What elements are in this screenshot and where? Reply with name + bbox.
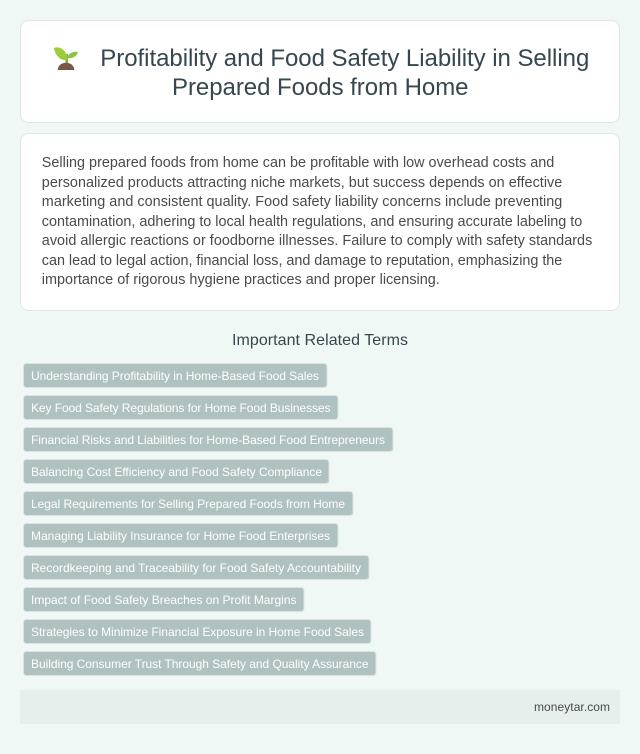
term: Understanding Profitability in Home-Based Food Sales (31, 369, 319, 383)
term (24, 556, 369, 580)
term (24, 652, 376, 676)
summary text (42, 155, 592, 288)
panel: title card (20, 20, 620, 122)
term: Building Consumer Trust Through Safety and Quality Assurance (31, 657, 369, 671)
term (24, 460, 329, 484)
title text (100, 45, 589, 101)
footer source text: moneytar.com (534, 700, 610, 714)
related terms list (24, 364, 393, 676)
title text: Prepared Foods from Home (172, 74, 468, 101)
term: Financial Risks and Liabilities for Home-Based Food Entrepreneurs (31, 433, 385, 447)
term: Impact of Food Safety Breaches on Profit Margins (31, 593, 296, 607)
term: Balancing Cost Efficiency and Food Safety Compliance (31, 465, 322, 479)
term (24, 428, 393, 452)
term (24, 588, 304, 612)
term: Key Food Safety Regulations for Home Food Businesses (31, 401, 330, 415)
term: Strategies to Minimize Financial Exposure in Home Food Sales (31, 625, 364, 639)
summary text: personalized products attracting niche markets, but success depends on effective (42, 175, 562, 191)
summary text: contamination, adhering to local health regulations, and ensuring accurate labeling to (42, 214, 582, 230)
title text: Profitability and Food Safety Liability in Selling (100, 45, 589, 72)
term (24, 524, 338, 548)
term (24, 396, 338, 420)
term: Managing Liability Insurance for Home Food Enterprises (31, 529, 330, 543)
panel: summary card (20, 134, 620, 310)
summary text: marketing and consistent quality. Food safety liability concerns include preventing (42, 194, 562, 210)
icon: seedling (54, 47, 78, 70)
summary text: avoid allergic reactions or foodborne illnesses. Failure to comply with safety standards (42, 233, 592, 249)
summary text: Selling prepared foods from home can be profitable with low overhead costs and (42, 155, 554, 171)
footer (20, 690, 620, 724)
summary text: importance of rigorous hygiene practices and proper licensing. (42, 272, 440, 288)
term: Legal Requirements for Selling Prepared Foods from Home (31, 497, 345, 511)
term: Recordkeeping and Traceability for Food Safety Accountability (31, 561, 361, 575)
term (24, 620, 371, 644)
section heading: Important Related Terms (232, 332, 408, 349)
term (24, 364, 327, 388)
term (24, 492, 353, 516)
summary text: can lead to legal action, financial loss, and damage to reputation, emphasizing the (42, 253, 562, 269)
